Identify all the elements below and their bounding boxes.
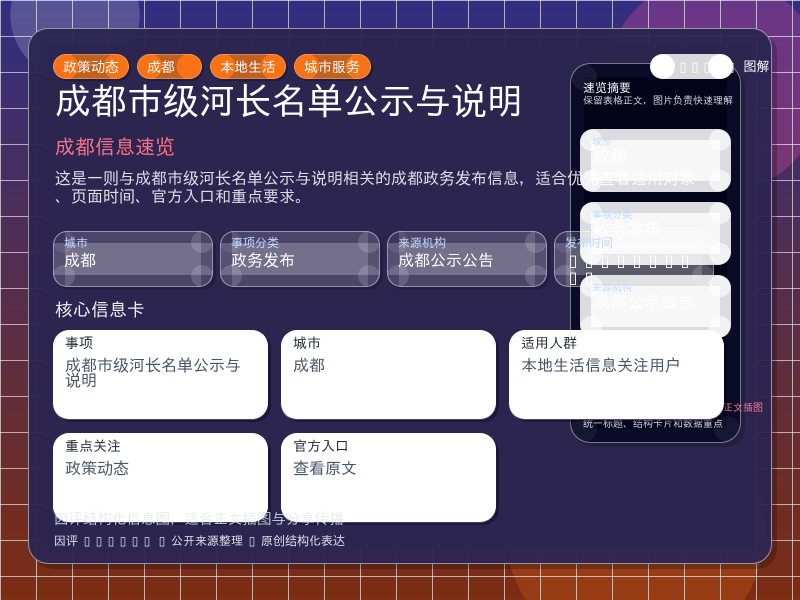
meta card: source (387, 231, 547, 287)
footer source: 因评 公开来源整理 原创结构化表达 (54, 535, 345, 547)
tag: city services (294, 54, 371, 79)
phone subheading: 保留表格正文，图片负责快速理解 (583, 96, 733, 106)
summary card: category (580, 202, 731, 265)
info card: audience: 本地生活信息关注用户 (521, 357, 681, 373)
info card: audience: 适用人群 (521, 336, 577, 350)
meta card: category: 事项分类 (231, 237, 279, 249)
summary card: category: 政务发布 (593, 221, 661, 238)
summary card: city: 城市 (592, 137, 612, 147)
summary card: source: 来源机构 (592, 283, 632, 293)
summary card: city (580, 129, 731, 192)
meta card: publish time: 发布时间 (565, 237, 613, 249)
info card: city: 成都 (293, 357, 325, 373)
footer source: ▯ (249, 534, 255, 548)
panel: phone summary (570, 63, 741, 443)
phone footer note: 统一标题、结构卡片和数据重点 (583, 419, 723, 429)
badge label: ▯ (667, 60, 675, 75)
meta card: publish time (554, 231, 714, 287)
footer source: ▯ (96, 534, 102, 548)
tag: local life: 本地生活 (220, 60, 276, 74)
info card: focus: 政策动态 (65, 460, 129, 476)
title: 成都市级河长名单公示与说明 (55, 83, 523, 119)
background circle: top right (605, 0, 800, 195)
section heading: 核心信息卡 (55, 301, 145, 319)
footer source: ▯ (144, 534, 150, 548)
summary card: source (580, 275, 731, 338)
summary card: city: 成都 (593, 148, 627, 165)
meta card: publish time: ▯ (585, 251, 593, 270)
meta card: publish time: ▯ (665, 251, 673, 270)
meta card: publish time: ▯ (617, 251, 625, 270)
info card: item (53, 330, 268, 419)
meta card: source: 成都公示公告 (398, 252, 494, 268)
info card: city: 城市 (293, 336, 321, 350)
tag: local life (210, 54, 286, 79)
meta card: publish time: ▯ (569, 268, 577, 287)
badge label: ▯ (727, 60, 735, 75)
footer source: ▯ (108, 534, 114, 548)
info card: city (281, 330, 496, 419)
footer source: ▯ (132, 534, 138, 548)
meta card: city: 成都 (64, 252, 96, 268)
badge label: ▯ (703, 60, 711, 75)
intro paragraph (55, 170, 695, 204)
info card: audience (509, 330, 724, 419)
badge label: 图解 (744, 60, 770, 73)
tag: Chengdu: 成都 (147, 60, 175, 74)
meta card: city (53, 231, 213, 287)
badge label: ▯ (691, 60, 699, 75)
meta card: publish time: ▯ (681, 251, 689, 270)
info card: official entry: 官方入口 (293, 439, 349, 453)
info card: item: 成都市级河长名单公示与说明 (65, 357, 241, 388)
badge: top right (650, 54, 733, 79)
info card: item: 事项 (65, 336, 93, 350)
footer caption: 因评结构化信息图，适合正文插图与分享传播 (54, 511, 344, 526)
subtitle: 成都信息速览 (55, 137, 175, 157)
meta card: city: 城市 (64, 237, 88, 249)
intro paragraph: 这是一则与成都市级河长名单公示与说明相关的成都政务发布信息，适合优先查看适用对象 (55, 170, 695, 186)
phone heading: 速览摘要 (583, 82, 631, 94)
meta card: category: 政务发布 (231, 252, 295, 268)
badge label: ▯ (679, 60, 687, 75)
background circle: top left (10, 0, 140, 80)
meta card: publish time: ▯ (649, 251, 657, 270)
badge label: ▯ (715, 60, 723, 75)
intro paragraph: 、页面时间、官方入口和重点要求。 (55, 188, 311, 204)
tag: policy news (53, 54, 129, 79)
footer source: ▯ (84, 534, 90, 548)
footer source: ▯ (120, 534, 126, 548)
summary card: category: 事项分类 (592, 210, 632, 220)
info card: official entry (281, 433, 496, 522)
info card: focus (53, 433, 268, 522)
tag: policy news: 政策动态 (63, 60, 119, 74)
meta card: publish time: ▯ (569, 251, 577, 270)
meta card: publish time: ▯ (601, 251, 609, 270)
meta card: publish time: ▯ (585, 268, 593, 287)
meta card: category (220, 231, 380, 287)
info card: official entry: 查看原文 (293, 460, 357, 476)
summary card: source: 成都公示公告 (593, 294, 695, 311)
meta card: publish time: ▯ (633, 251, 641, 270)
meta card: source: 来源机构 (398, 237, 446, 249)
badge label (667, 60, 770, 75)
tag: Chengdu (137, 54, 202, 79)
footer source: ▯ (159, 534, 165, 548)
tag: city services: 城市服务 (304, 60, 360, 74)
phone footer pink note: 结构化信息图可用于分享传播与正文插图 (583, 403, 763, 413)
background circle: bottom (505, 400, 765, 600)
info card: focus: 重点关注 (65, 439, 121, 453)
